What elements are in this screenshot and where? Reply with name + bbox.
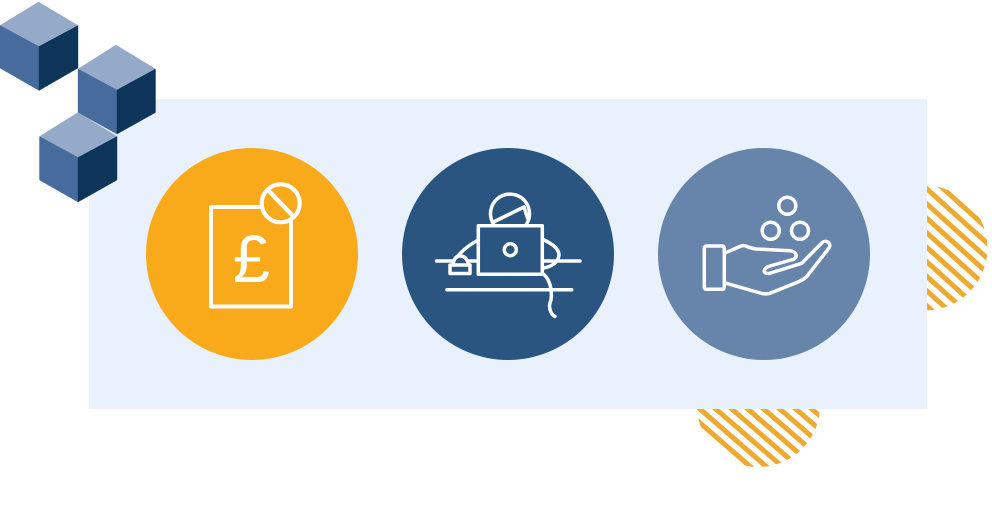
- icon: prohibition sign: [262, 184, 300, 222]
- orange circle with pound document icon: [146, 148, 358, 360]
- striped semicircle: right: [927, 186, 988, 310]
- icon: document: [211, 207, 291, 306]
- cube cluster: [0, 2, 156, 202]
- slate blue circle with hand and coins icon: [658, 148, 870, 360]
- cube: right: [78, 45, 156, 134]
- cube: top left: [0, 2, 78, 90]
- icon: hand with coins: [704, 197, 830, 294]
- icon: person at laptop: [436, 194, 580, 316]
- dark blue circle with laptop user icon: [402, 148, 614, 360]
- pound sign: £: [233, 222, 270, 297]
- background panel: [89, 99, 927, 409]
- striped semicircle: bottom: [697, 409, 820, 467]
- cube: bottom: [40, 112, 117, 202]
